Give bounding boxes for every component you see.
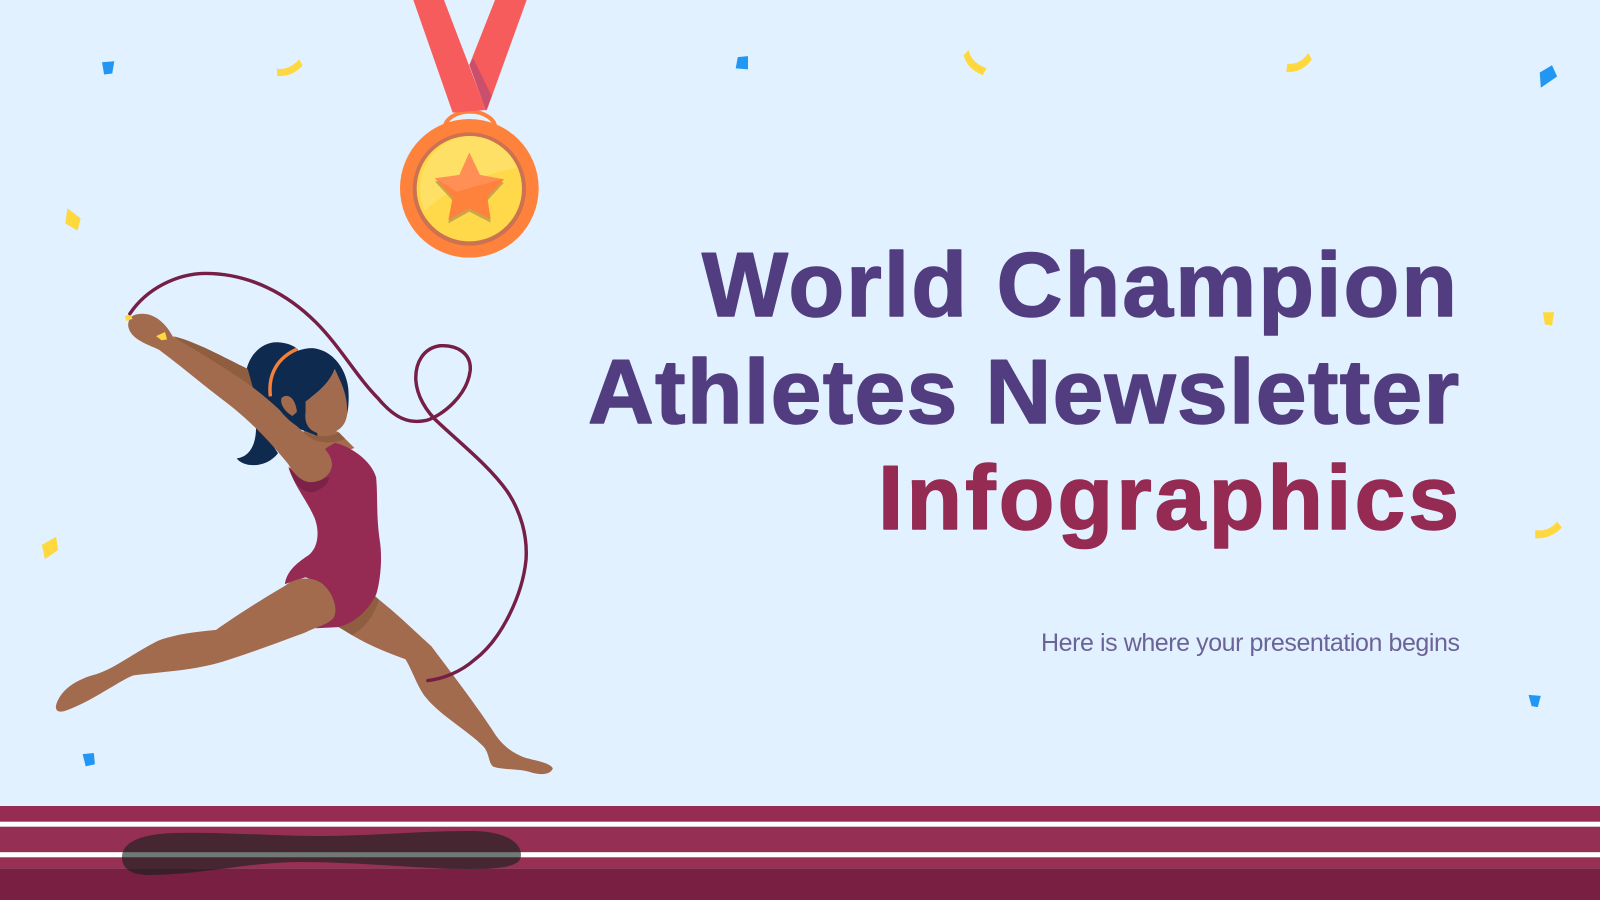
back of hair — [245, 342, 298, 403]
ribbon — [130, 273, 526, 681]
title line 3: Infographics — [878, 448, 1459, 549]
subtitle: Here is where your presentation begins — [1041, 629, 1460, 657]
leotard — [285, 443, 381, 628]
yellow grip on hand — [156, 332, 167, 340]
face — [305, 369, 347, 434]
title — [588, 235, 1459, 549]
medal ribbon — [413, 0, 527, 113]
medal — [400, 0, 539, 258]
front leg — [56, 578, 335, 712]
title line 1: World Champion — [702, 235, 1457, 336]
medal ring — [445, 112, 495, 145]
gymnast — [56, 273, 553, 774]
ear — [281, 396, 297, 416]
arm shade — [173, 336, 254, 391]
confetti pieces — [42, 51, 1561, 766]
medal disc — [400, 119, 539, 258]
title line 2: Athletes Newsletter — [588, 342, 1459, 443]
hair under ear — [268, 388, 318, 436]
head hair — [271, 348, 349, 433]
back leg — [340, 596, 553, 774]
ponytail — [237, 419, 278, 465]
gymnast floor shadow — [122, 831, 521, 875]
running track band — [0, 806, 1600, 900]
raised arm and hand — [128, 314, 332, 482]
neck and shoulder — [302, 422, 354, 457]
back leg shade — [338, 595, 379, 635]
medal star — [435, 153, 504, 223]
headband — [270, 349, 297, 396]
